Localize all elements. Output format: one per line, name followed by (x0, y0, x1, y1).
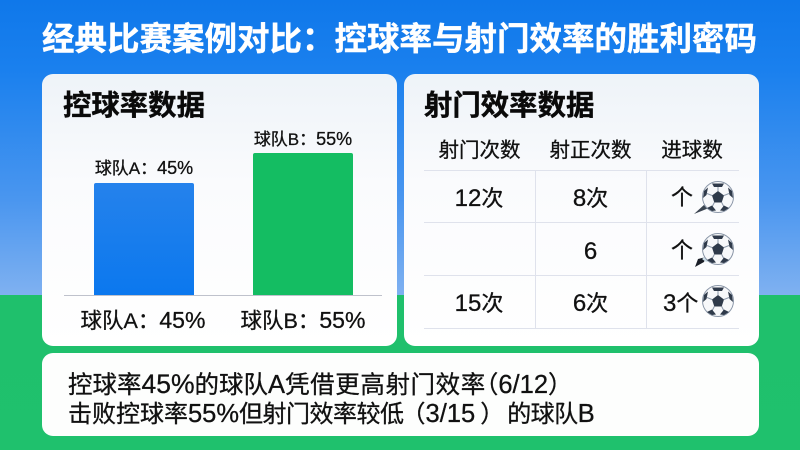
icon: football row 2 (695, 233, 734, 267)
column header: shots: 射门次数 (438, 139, 520, 162)
bar label: team B: 球队B：55% (254, 129, 352, 149)
panel: possession data (42, 74, 397, 346)
cell: row 2 goals: 个 (671, 238, 693, 263)
axis label: team A: 球队A：45% (81, 307, 205, 333)
heading: shot efficiency: 射门效率数据 (424, 90, 594, 122)
bar: team B (253, 153, 353, 295)
icon: football row 3 (702, 285, 734, 317)
title: 经典比赛案例对比：控球率与射门效率的胜利密码 (42, 21, 757, 57)
bar label: team A: 球队A：45% (95, 158, 193, 178)
cell: row 3 on target: 6次 (573, 290, 608, 317)
cell: row 3 goals: 3个 (663, 290, 698, 317)
column header: shots on target: 射正次数 (550, 139, 632, 162)
heading: possession: 控球率数据 (63, 90, 205, 122)
icon: football row 1 (694, 181, 734, 214)
conclusion text line 1: 控球率45%的球队A凭借更高射门效率（6/12） (68, 369, 573, 399)
table: shot data (424, 139, 739, 329)
column header: goals: 进球数 (661, 139, 723, 162)
cell: row 1 shots: 12次 (455, 185, 503, 212)
cell: row 2 on target: 6 (584, 238, 597, 265)
bar: team A (94, 183, 194, 295)
cell: row 1 on target: 8次 (573, 185, 608, 212)
cell: row 3 shots: 15次 (455, 290, 503, 317)
panel: conclusion (42, 353, 759, 436)
panel: shot efficiency data (404, 74, 759, 346)
conclusion text line 2: 击败控球率55%但射门效率较低（3/15）的球队B (68, 400, 595, 428)
cell: row 1 goals: 个 (671, 185, 693, 210)
axis label: team B: 球队B：55% (241, 307, 365, 333)
